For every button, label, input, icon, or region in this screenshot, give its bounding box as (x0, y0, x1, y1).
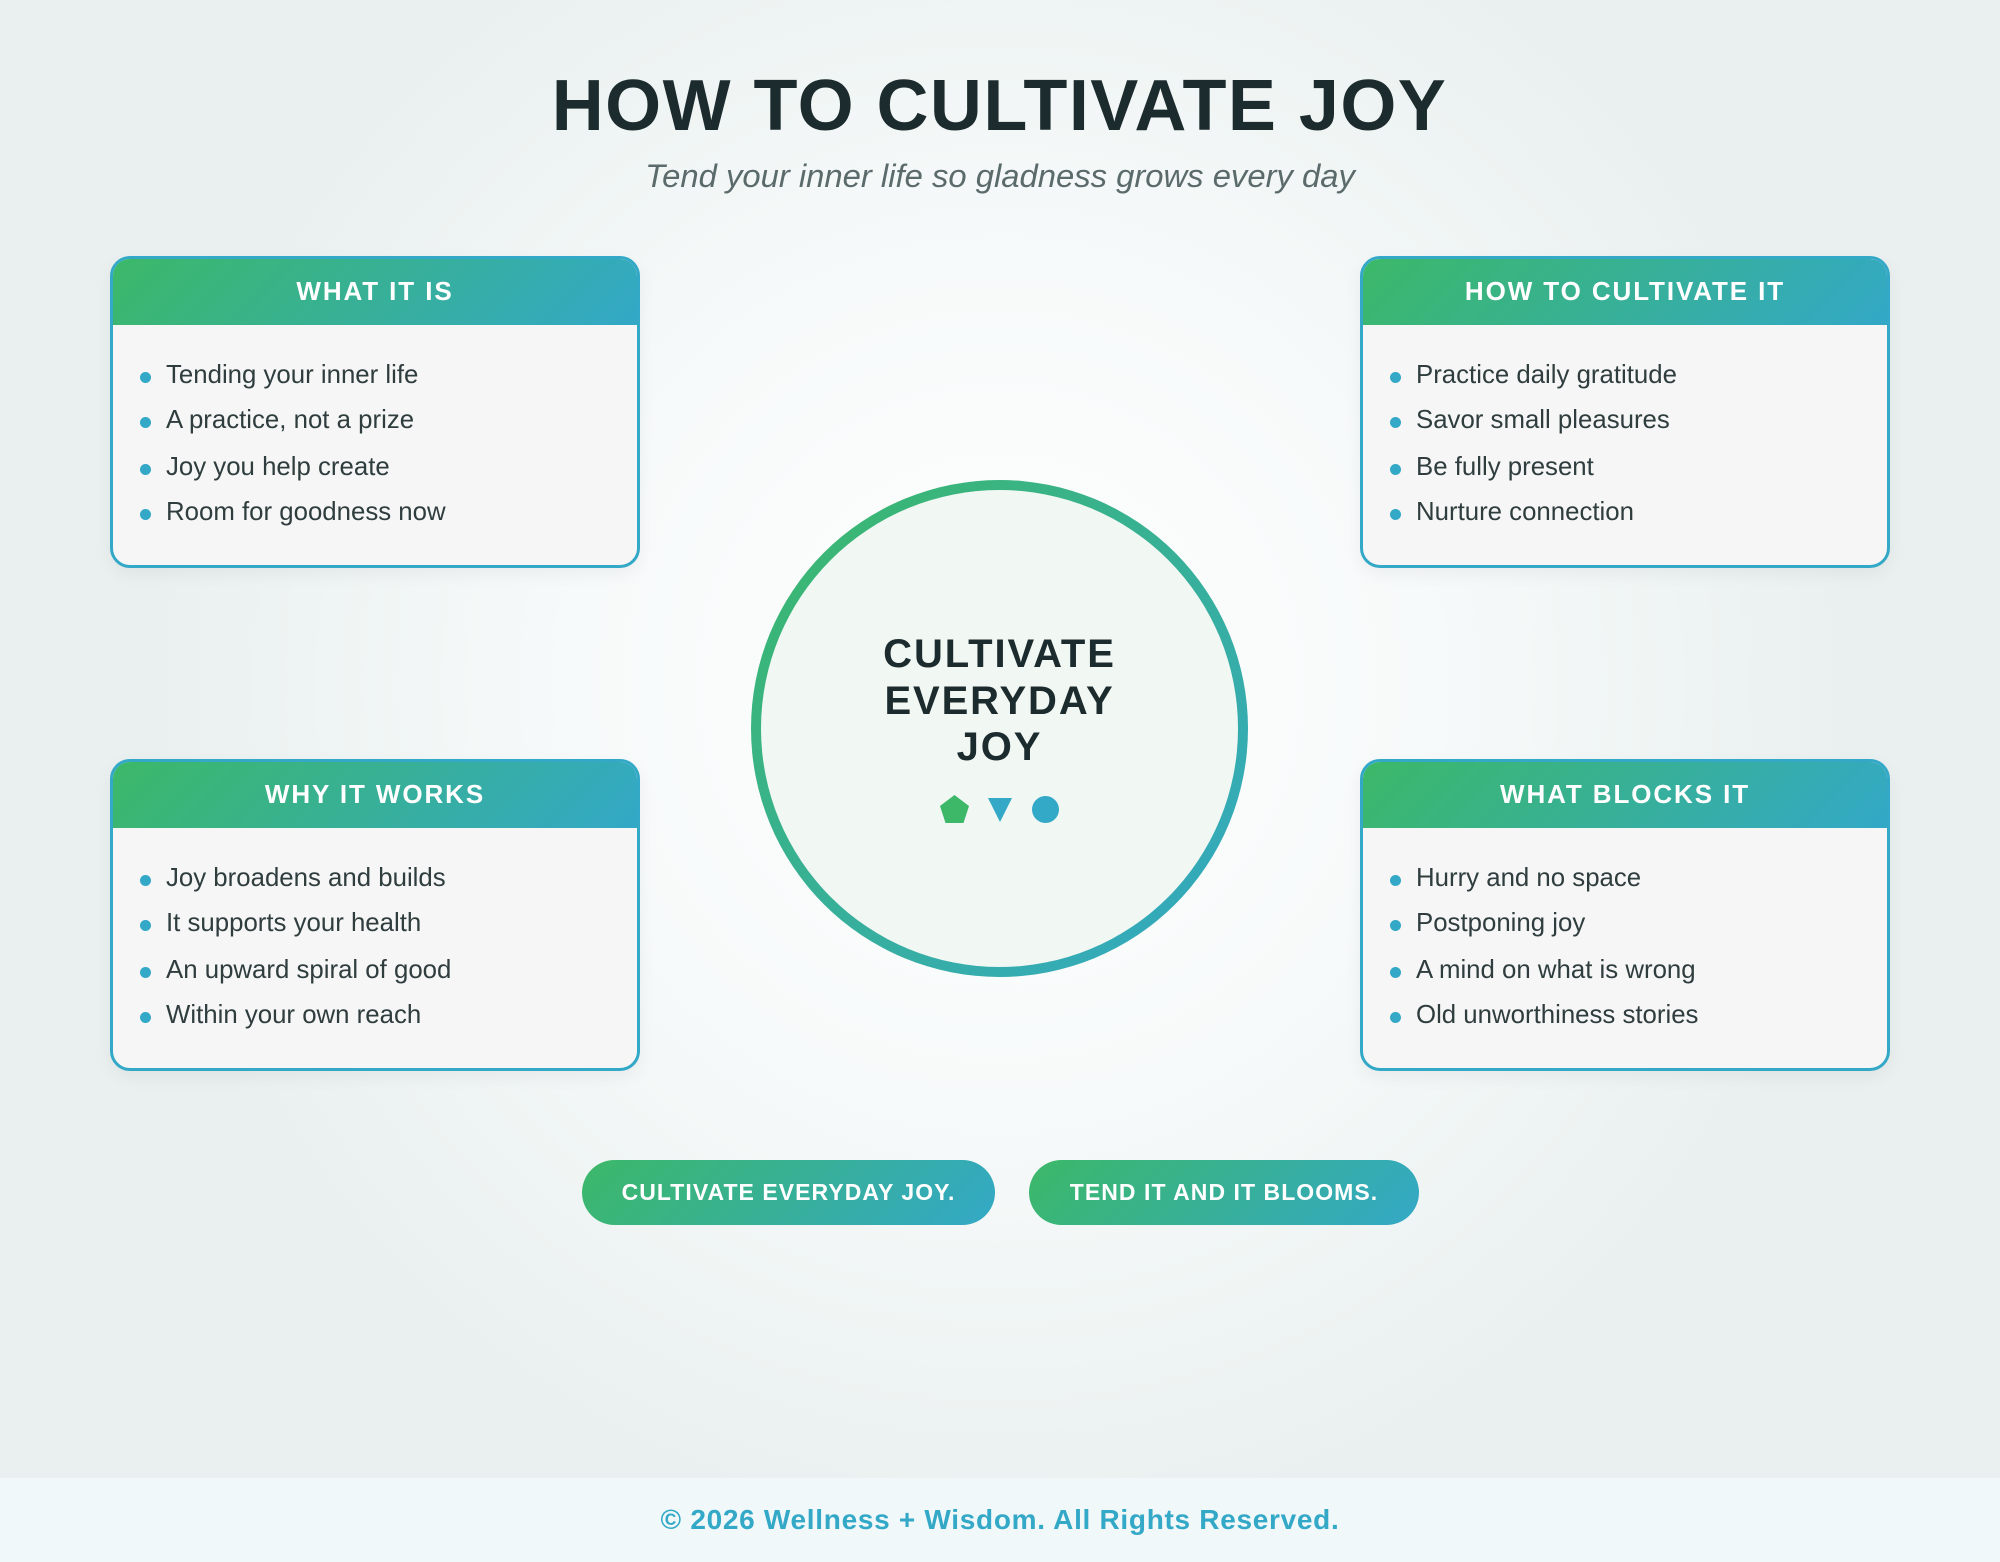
pill: tend it and it blooms: TEND IT AND IT BLOOMS. (1070, 1179, 1378, 1205)
heading: what blocks it (1363, 762, 1887, 828)
item 3: Joy you help create (166, 453, 390, 481)
bullet 2 (140, 417, 151, 428)
bullet 2 (140, 920, 151, 931)
panel: how to cultivate it (1360, 256, 1890, 568)
center circle (751, 480, 1248, 977)
bullet 1 (140, 875, 151, 886)
heading: how to cultivate it (1363, 259, 1887, 325)
item 2: Savor small pleasures (1416, 406, 1670, 434)
item 4: Within your own reach (166, 1001, 421, 1029)
heading: what blocks it: WHAT BLOCKS IT (1500, 779, 1750, 809)
pill: cultivate everyday joy: CULTIVATE EVERYDAY JOY. (622, 1179, 955, 1205)
item 3: Be fully present (1416, 453, 1594, 481)
heading: what it is (113, 259, 637, 325)
center text: JOY (957, 725, 1042, 769)
icon: pentagon (940, 795, 969, 823)
footer: © 2026 Wellness + Wisdom. All Rights Reserved. (661, 1504, 1339, 1535)
center text: CULTIVATE (883, 632, 1116, 676)
icon: circle (1032, 796, 1059, 823)
bullet 4 (140, 509, 151, 520)
icon: triangle (988, 798, 1012, 822)
bullet 2 (1390, 920, 1401, 931)
item 2: It supports your health (166, 909, 421, 937)
item 1: Practice daily gratitude (1416, 361, 1677, 389)
pill: tend it and it blooms (1029, 1160, 1419, 1225)
panel: what it is (110, 256, 640, 568)
item 3: A mind on what is wrong (1416, 956, 1696, 984)
pill: cultivate everyday joy (582, 1160, 995, 1225)
panel: what blocks it (1360, 759, 1890, 1071)
bullet 3 (140, 464, 151, 475)
bullet 4 (1390, 509, 1401, 520)
heading: why it works (113, 762, 637, 828)
bullet 4 (140, 1012, 151, 1023)
item 4: Room for goodness now (166, 498, 446, 526)
item 1: Joy broadens and builds (166, 864, 446, 892)
subtitle: Tend your inner life so gladness grows every day (645, 157, 1355, 194)
center text: EVERYDAY (884, 678, 1115, 722)
bullet 1 (1390, 372, 1401, 383)
item 3: An upward spiral of good (166, 956, 451, 984)
bullet 1 (1390, 875, 1401, 886)
title: HOW TO CULTIVATE JOY (552, 66, 1447, 146)
heading: what it is: WHAT IT IS (296, 276, 454, 306)
bullet 3 (1390, 967, 1401, 978)
panel: why it works (110, 759, 640, 1071)
bullet 3 (1390, 464, 1401, 475)
item 2: A practice, not a prize (166, 406, 414, 434)
bullet 3 (140, 967, 151, 978)
item 2: Postponing joy (1416, 909, 1585, 937)
item 1: Hurry and no space (1416, 864, 1641, 892)
bullet 2 (1390, 417, 1401, 428)
bullet 1 (140, 372, 151, 383)
item 4: Nurture connection (1416, 498, 1634, 526)
heading: how to cultivate it: HOW TO CULTIVATE IT (1465, 276, 1785, 306)
bullet 4 (1390, 1012, 1401, 1023)
heading: why it works: WHY IT WORKS (265, 779, 485, 809)
item 4: Old unworthiness stories (1416, 1001, 1698, 1029)
icons: pentagon, triangle, circle (940, 795, 1059, 823)
item 1: Tending your inner life (166, 361, 418, 389)
center text (883, 632, 1116, 769)
footer (0, 1478, 2000, 1562)
